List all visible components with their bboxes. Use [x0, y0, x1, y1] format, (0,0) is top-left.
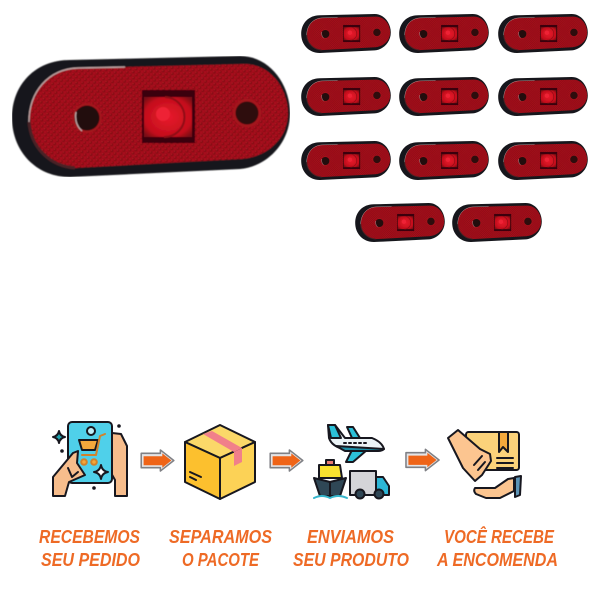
icon: hands receiving parcel: [448, 430, 521, 498]
arrow 3: [406, 449, 439, 471]
label: step 4: VOCÊ RECEBE: [444, 526, 555, 547]
arrow 1: [141, 450, 174, 471]
truck: [350, 471, 389, 498]
label: step 4: [436, 526, 558, 570]
plane: [328, 425, 384, 462]
label: step 1: RECEBEMOS: [39, 527, 140, 547]
label: step 2: [169, 527, 272, 570]
label: step 1: [39, 527, 140, 570]
icon: plane, ship and truck: [314, 425, 389, 498]
label: step 4: A ENCOMENDA: [436, 550, 558, 570]
icon: cardboard box: [185, 425, 255, 499]
label: step 2: O PACOTE: [182, 550, 260, 570]
icon: hands holding phone with shopping cart: [53, 422, 127, 496]
arrow 2: [270, 450, 303, 471]
main product photo: red marker lamp: [12, 56, 290, 177]
label: step 3: SEU PRODUTO: [293, 550, 409, 570]
grid of small lamps: [301, 14, 588, 242]
label: step 3: ENVIAMOS: [307, 527, 394, 547]
label: step 1: SEU PEDIDO: [41, 550, 140, 570]
label: step 2: SEPARAMOS: [169, 527, 272, 547]
label: step 3: [293, 527, 409, 570]
ship: [314, 460, 347, 498]
